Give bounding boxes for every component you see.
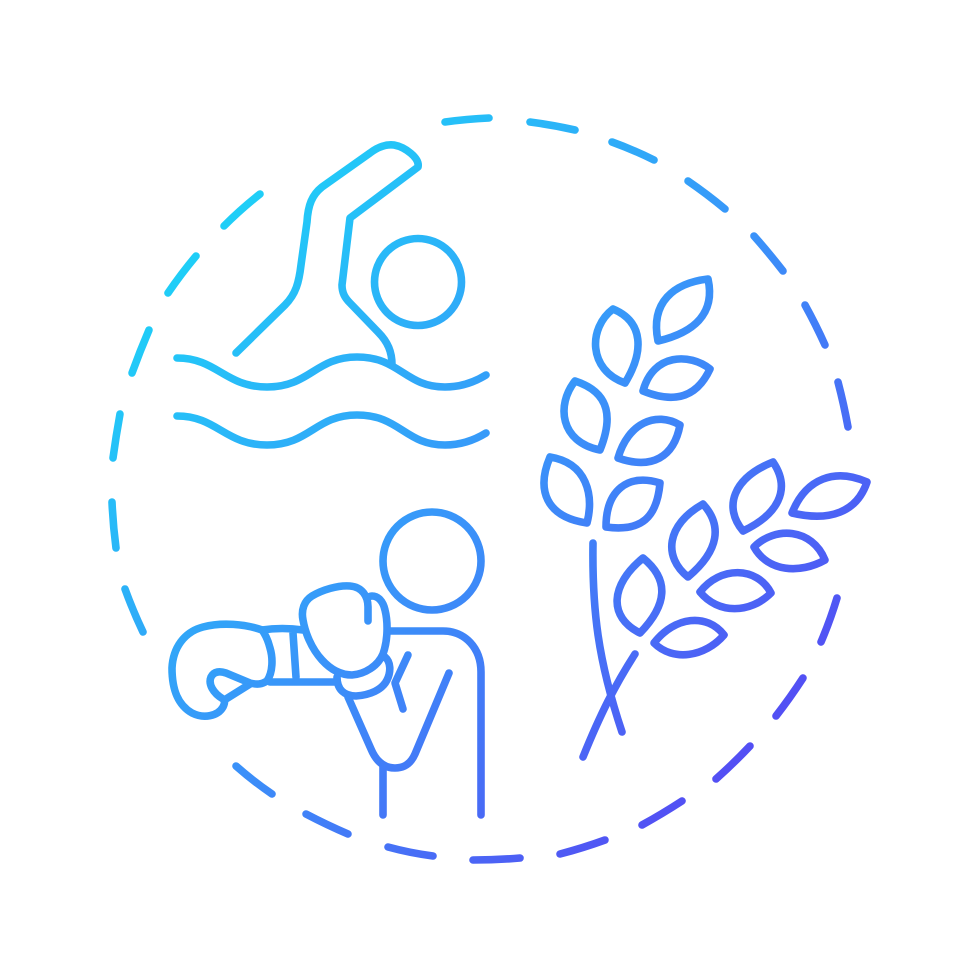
swimmer arm and torso <box>236 145 418 365</box>
boxer torso line <box>379 767 387 815</box>
raised boxing glove <box>302 586 387 675</box>
icon: boxer <box>172 512 481 815</box>
boxer head <box>383 512 481 610</box>
icon: swimmer <box>177 145 486 445</box>
upper wheat stalk <box>544 279 710 732</box>
boxer inner arm <box>395 655 408 709</box>
raised glove cuff <box>337 657 390 696</box>
extended glove thumb line <box>226 684 250 699</box>
boxer shoulder and back <box>388 631 481 815</box>
boxer raised forearm <box>348 673 449 768</box>
extended boxing glove <box>172 624 272 716</box>
water wave lower <box>177 415 486 445</box>
lower wheat stalk <box>583 462 867 757</box>
swimmer head <box>374 238 462 326</box>
water wave upper <box>177 357 486 387</box>
extended arm <box>262 628 335 682</box>
icon: wheat <box>544 279 867 757</box>
dashed circle border <box>112 118 848 860</box>
